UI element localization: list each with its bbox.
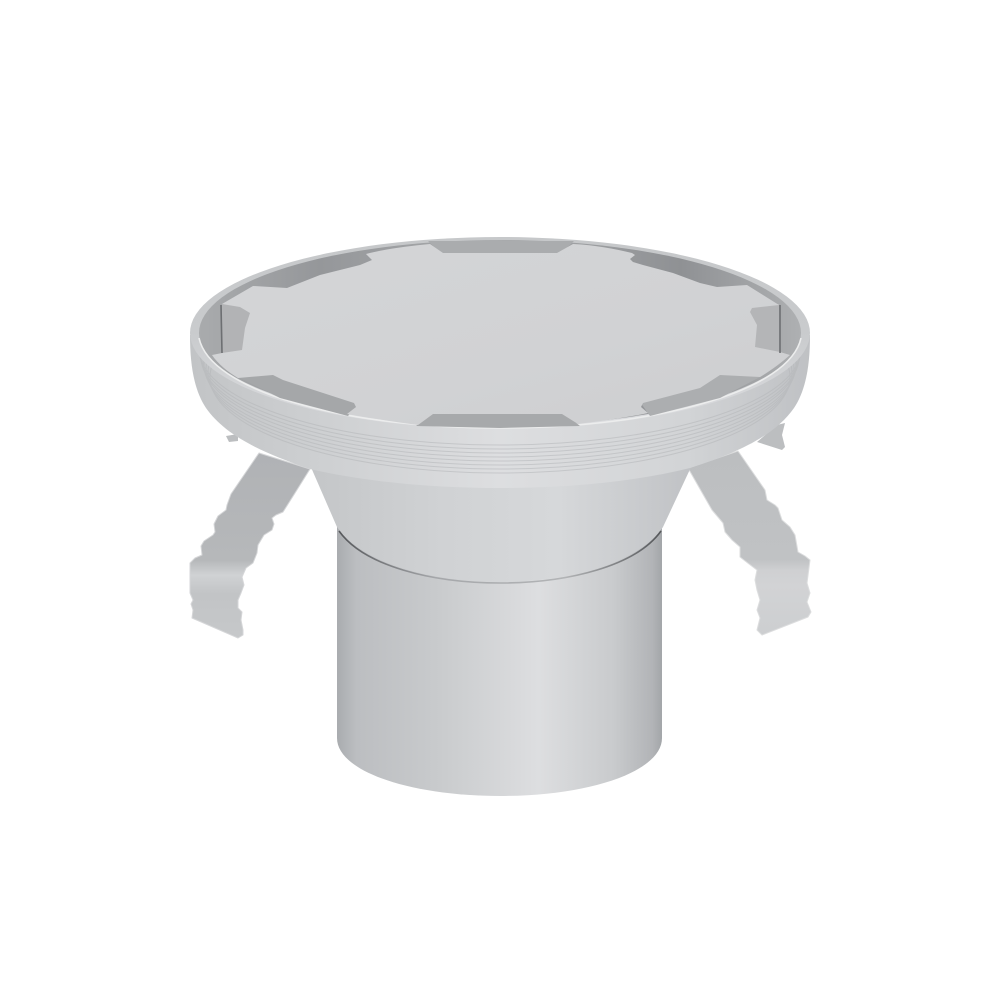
- notch: bottom right: [640, 372, 762, 416]
- conical neck: [310, 465, 692, 582]
- inner flat plate: [212, 244, 790, 425]
- seam between cone and cylinder: [339, 531, 661, 583]
- clip: rear right: [757, 423, 785, 450]
- notch: bottom: [416, 413, 580, 428]
- flange top rim: [190, 237, 810, 429]
- product illustration: recessed metal light housing: [190, 237, 812, 796]
- notch: right: [748, 304, 779, 354]
- recessed interior wall: [199, 240, 801, 426]
- clip: front right: [688, 451, 811, 635]
- notch: bottom left: [236, 372, 360, 416]
- clip: rear left: [226, 434, 238, 442]
- notch: top: [428, 241, 574, 254]
- clip: front left: [190, 453, 310, 638]
- notch shadow lines: [221, 305, 780, 353]
- front lip highlight: [199, 338, 801, 428]
- notch: left: [222, 304, 252, 354]
- lower cylinder body: [337, 520, 662, 796]
- flange outer band with machined grooves: [190, 335, 810, 488]
